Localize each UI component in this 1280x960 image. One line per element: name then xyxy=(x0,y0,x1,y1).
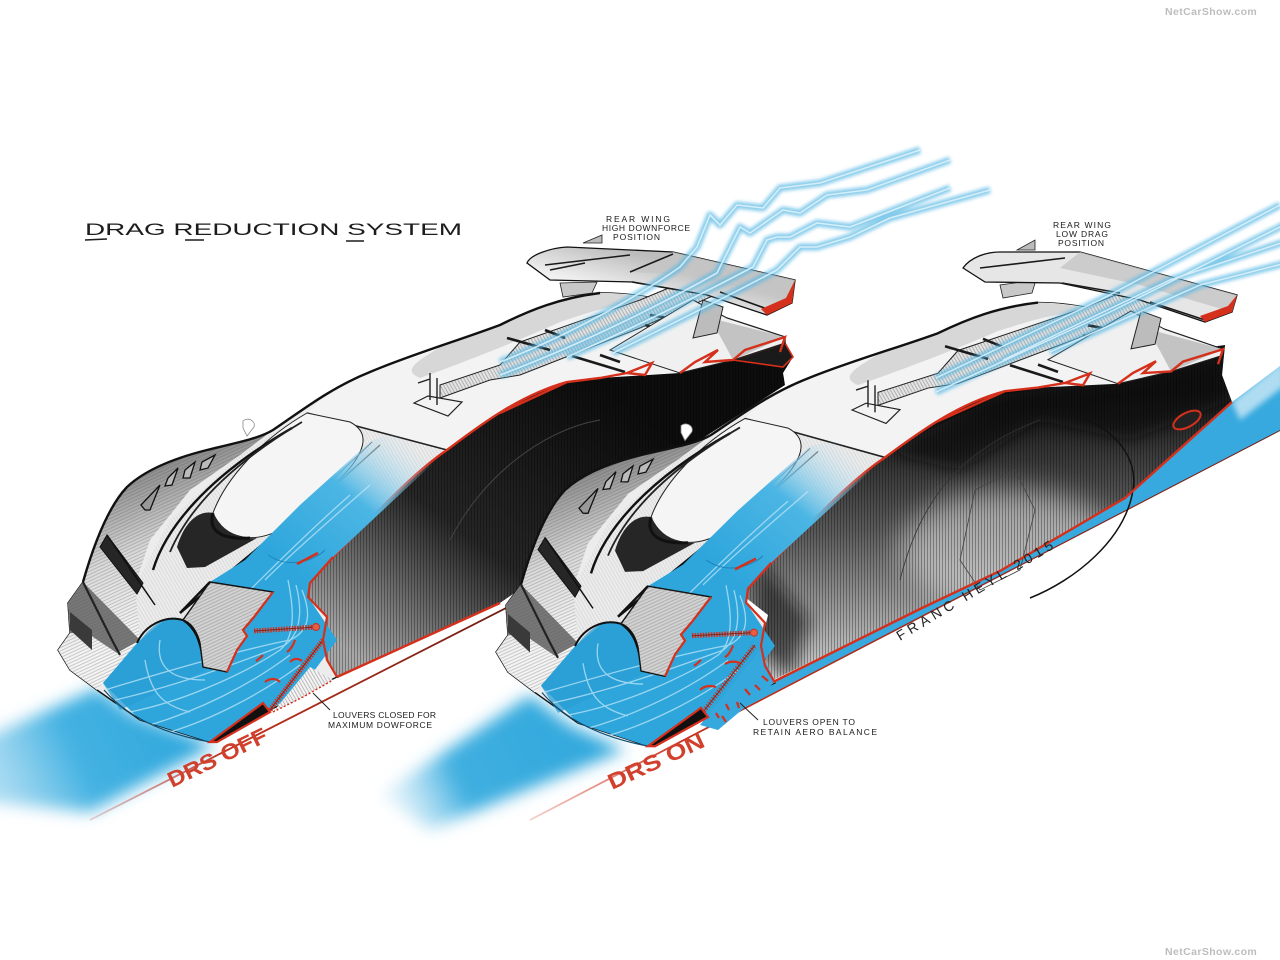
note: louvers closed: MAXIMUM DOWFORCE xyxy=(328,720,432,730)
side cavity xyxy=(745,345,1232,681)
note: louvers closed xyxy=(313,693,436,730)
note: rear wing high downforce: REAR WING xyxy=(606,214,670,224)
car: DRS on xyxy=(496,240,1237,754)
label: DRS on: DRS ON xyxy=(604,728,708,795)
airflow: wing wake, DRS on xyxy=(936,205,1280,392)
note: louvers open xyxy=(740,703,877,737)
watermark bottom: NetCarShow.com xyxy=(1165,946,1257,958)
body shell xyxy=(58,272,785,742)
blue band under car: DRS on xyxy=(705,360,1280,728)
airflow streak: DRS on xyxy=(380,695,625,830)
rear wing: low drag xyxy=(963,240,1237,322)
front body blue flow xyxy=(103,432,445,742)
front body blue flow xyxy=(541,435,883,749)
open louvers xyxy=(700,645,775,730)
airflow: wing wake, DRS off xyxy=(500,150,990,375)
watermark top: NetCarShow.com xyxy=(1165,6,1257,18)
note: rear wing low drag: LOW DRAG xyxy=(1056,229,1108,239)
signature: FRANC HEYL 2015 xyxy=(893,537,1056,644)
car: DRS off xyxy=(58,235,795,742)
label: DRS off: DRS OFF xyxy=(163,723,271,792)
note: rear wing low drag: REAR WING xyxy=(1053,220,1111,230)
note: louvers open: LOUVERS OPEN TO xyxy=(763,717,855,727)
title: DRAG REDUCTION SYSTEM xyxy=(85,220,462,239)
body shell xyxy=(496,274,1223,754)
ground line: DRS off xyxy=(90,606,510,820)
closed louvers xyxy=(265,640,333,712)
ground line: DRS on xyxy=(530,430,1280,820)
side cavity xyxy=(308,343,793,677)
front details xyxy=(575,556,775,748)
note: rear wing low drag xyxy=(1053,220,1111,248)
front details xyxy=(137,553,337,742)
rear wing: high downforce xyxy=(527,235,795,315)
note: rear wing high downforce: POSITION xyxy=(613,232,660,242)
airflow streak: DRS off xyxy=(0,688,215,812)
note: rear wing high downforce: HIGH DOWNFORCE xyxy=(602,223,690,233)
note: rear wing high downforce xyxy=(602,214,690,242)
note: louvers closed: LOUVERS CLOSED FOR xyxy=(333,710,436,720)
note: louvers open: RETAIN AERO BALANCE xyxy=(753,727,877,737)
note: rear wing low drag: POSITION xyxy=(1058,238,1104,248)
